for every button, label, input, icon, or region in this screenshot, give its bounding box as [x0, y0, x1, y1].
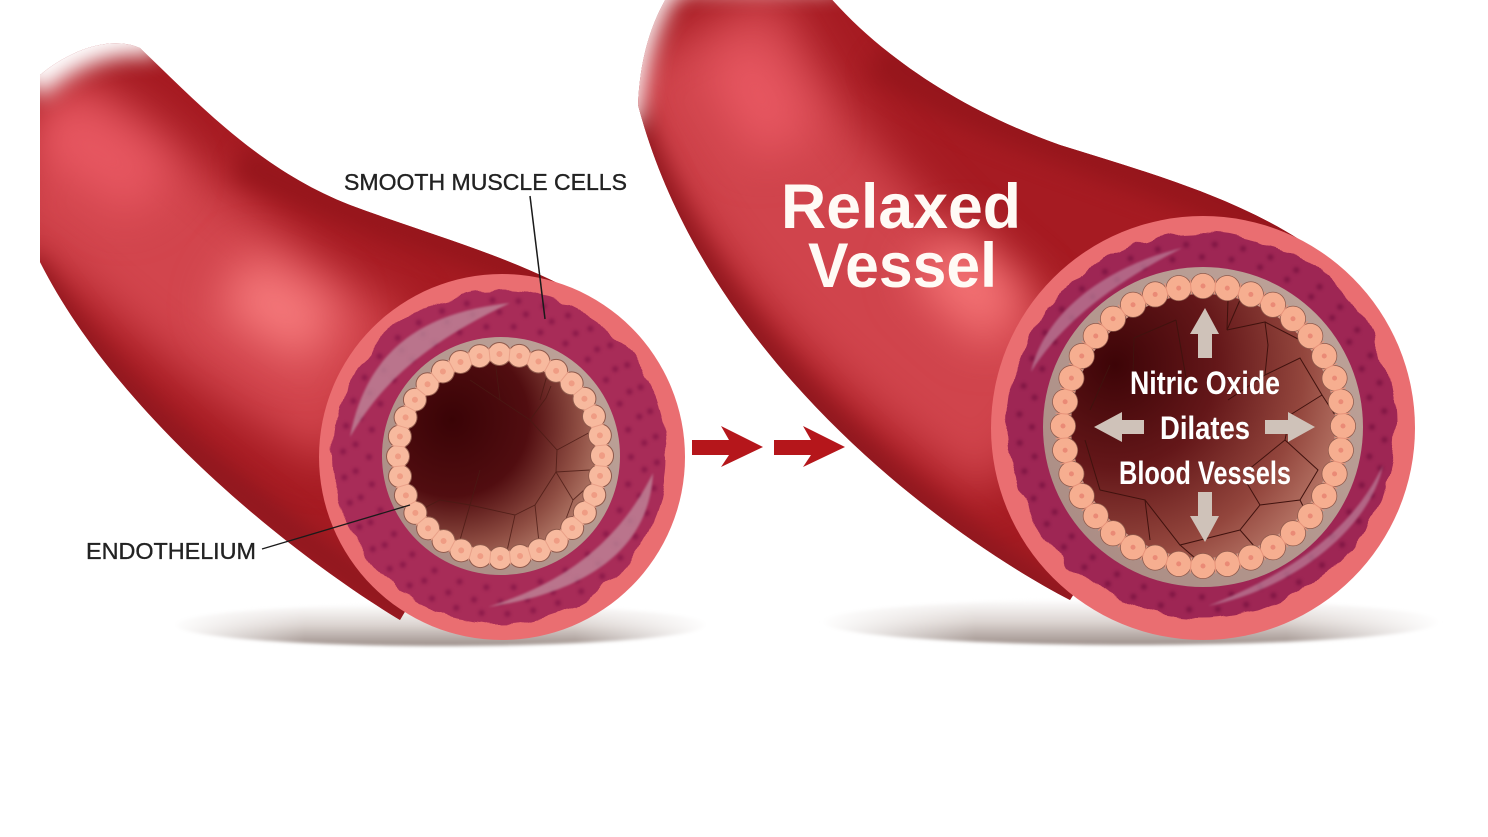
text: nitric oxide dilates blood vessels: Dilates [1160, 410, 1250, 446]
arrow down [1190, 492, 1219, 542]
vessel body: left [40, 43, 558, 620]
text: nitric oxide dilates blood vessels: Blood Vessels [1119, 455, 1291, 491]
dilation arrows [1094, 308, 1315, 542]
text: nitric oxide dilates blood vessels [1119, 365, 1291, 491]
arrow: first red [692, 426, 763, 467]
shadow: left vessel [170, 600, 710, 650]
heading: relaxed vessel [781, 172, 1021, 301]
pale muscle streak lower [1208, 465, 1383, 606]
pale muscle streak upper [350, 303, 510, 437]
vessel cross-section: left [319, 274, 685, 640]
muscle layer [333, 290, 667, 624]
endothelial cell cracks [1085, 300, 1335, 558]
pale muscle streak upper [1031, 248, 1182, 372]
endothelial cell cracks [420, 360, 595, 560]
label: endothelium: ENDOTHELIUM [86, 538, 256, 564]
arrow right [1265, 412, 1315, 442]
heading: relaxed vessel: Vessel [808, 231, 997, 301]
connective gray ring [382, 337, 620, 575]
outer wall [991, 216, 1415, 640]
outer wall [319, 274, 685, 640]
arrow up [1190, 308, 1219, 358]
vessel cross-section: right [991, 216, 1415, 640]
endothelial cell ring [1063, 286, 1343, 566]
label: smooth muscle cells: SMOOTH MUSCLE CELLS [344, 169, 627, 195]
arrow left [1094, 412, 1144, 442]
shadow: right vessel [820, 595, 1442, 649]
lumen [1071, 294, 1335, 558]
arrow: second red [774, 426, 845, 467]
vessel body: right [638, 0, 1298, 600]
endothelial cell ring [398, 354, 602, 558]
lumen [403, 359, 597, 553]
label: endothelium [86, 505, 410, 564]
heading: relaxed vessel: Relaxed [781, 172, 1021, 242]
text: nitric oxide dilates blood vessels: Nitric Oxide [1130, 365, 1280, 401]
connective gray ring [1043, 267, 1363, 587]
pale muscle streak lower [488, 473, 653, 607]
infographic: blood vessel dilation [40, 0, 1420, 648]
label: smooth muscle cells [344, 169, 627, 319]
muscle layer [1007, 232, 1397, 622]
